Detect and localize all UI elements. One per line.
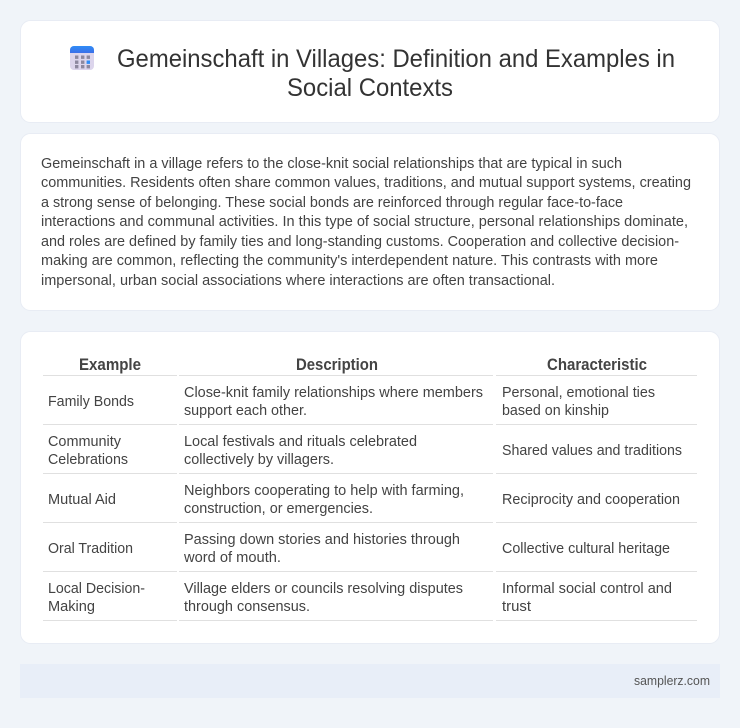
row: local decision-making: Making (48, 599, 95, 615)
row: mutual aid (48, 483, 680, 517)
title (117, 45, 675, 102)
row: community celebrations: Community (48, 434, 122, 450)
row: local decision-making: Village elders or councils resolving disputes (184, 581, 463, 597)
text block: definition: a strong sense of belonging. These social bonds are reinforced through regular face-to-face (41, 195, 623, 211)
row: family bonds: Close-knit family relationships where members (184, 385, 483, 401)
table header: Characteristic (547, 356, 647, 374)
row: oral tradition (48, 532, 670, 566)
row: community celebrations (48, 434, 682, 468)
text block: definition: communities. Residents often share common values, traditions, and mutual support systems, creating (41, 175, 691, 191)
title: Gemeinschaft in Villages: Definition and Examples in (117, 45, 675, 73)
row: mutual aid: construction, or emergencies. (184, 501, 373, 517)
panel: intro paragraph (20, 134, 720, 310)
text block: definition: interactions and communal activities. In this type of social structure, personal relationships dominate, (41, 214, 688, 230)
row: community celebrations: Celebrations (48, 452, 128, 468)
row: local decision-making: Informal social control and (502, 581, 672, 597)
row: family bonds (48, 385, 655, 419)
table header: Example (79, 356, 141, 374)
text block: definition: and roles are defined by family ties and long-standing customs. Cooperation and collective decision- (41, 234, 679, 250)
panel: examples table (20, 332, 720, 644)
text block: definition: impersonal, urban social associations where interactions are often transactional. (41, 273, 555, 289)
row: community celebrations: Local festivals and rituals celebrated (184, 434, 417, 450)
text block: definition: making are common, reflecting the community's interdependent nature. This contrasts with more (41, 253, 658, 269)
row: mutual aid: Reciprocity and cooperation (502, 492, 680, 508)
title: Social Contexts (287, 74, 453, 102)
row: family bonds: Family Bonds (48, 394, 134, 410)
icon: calendar (70, 46, 94, 70)
row: family bonds: support each other. (184, 403, 307, 419)
row: oral tradition: word of mouth. (183, 550, 281, 566)
table header: Description (296, 356, 378, 374)
row: oral tradition: Passing down stories and histories through (184, 532, 460, 548)
footer (20, 664, 720, 698)
row: family bonds: based on kinship (502, 403, 609, 419)
table header (79, 356, 647, 374)
row: local decision-making (48, 581, 672, 615)
footer: samplerz.com (634, 674, 710, 688)
row: mutual aid: Neighbors cooperating to help with farming, (184, 483, 464, 499)
row: community celebrations: Shared values and traditions (502, 443, 682, 459)
row: mutual aid: Mutual Aid (48, 492, 116, 508)
panel: title card (20, 20, 720, 122)
text block: definition: Gemeinschaft in a village refers to the close-knit social relationships that are typical in such (41, 156, 622, 172)
row: local decision-making: Local Decision- (48, 581, 145, 597)
text block: definition (41, 156, 691, 289)
row: community celebrations: collectively by villagers. (184, 452, 334, 468)
row: oral tradition: Oral Tradition (48, 541, 133, 557)
row: local decision-making: trust (502, 599, 531, 615)
row: oral tradition: Collective cultural heritage (502, 541, 670, 557)
row: family bonds: Personal, emotional ties (502, 385, 655, 401)
row: local decision-making: through consensus. (184, 599, 310, 615)
